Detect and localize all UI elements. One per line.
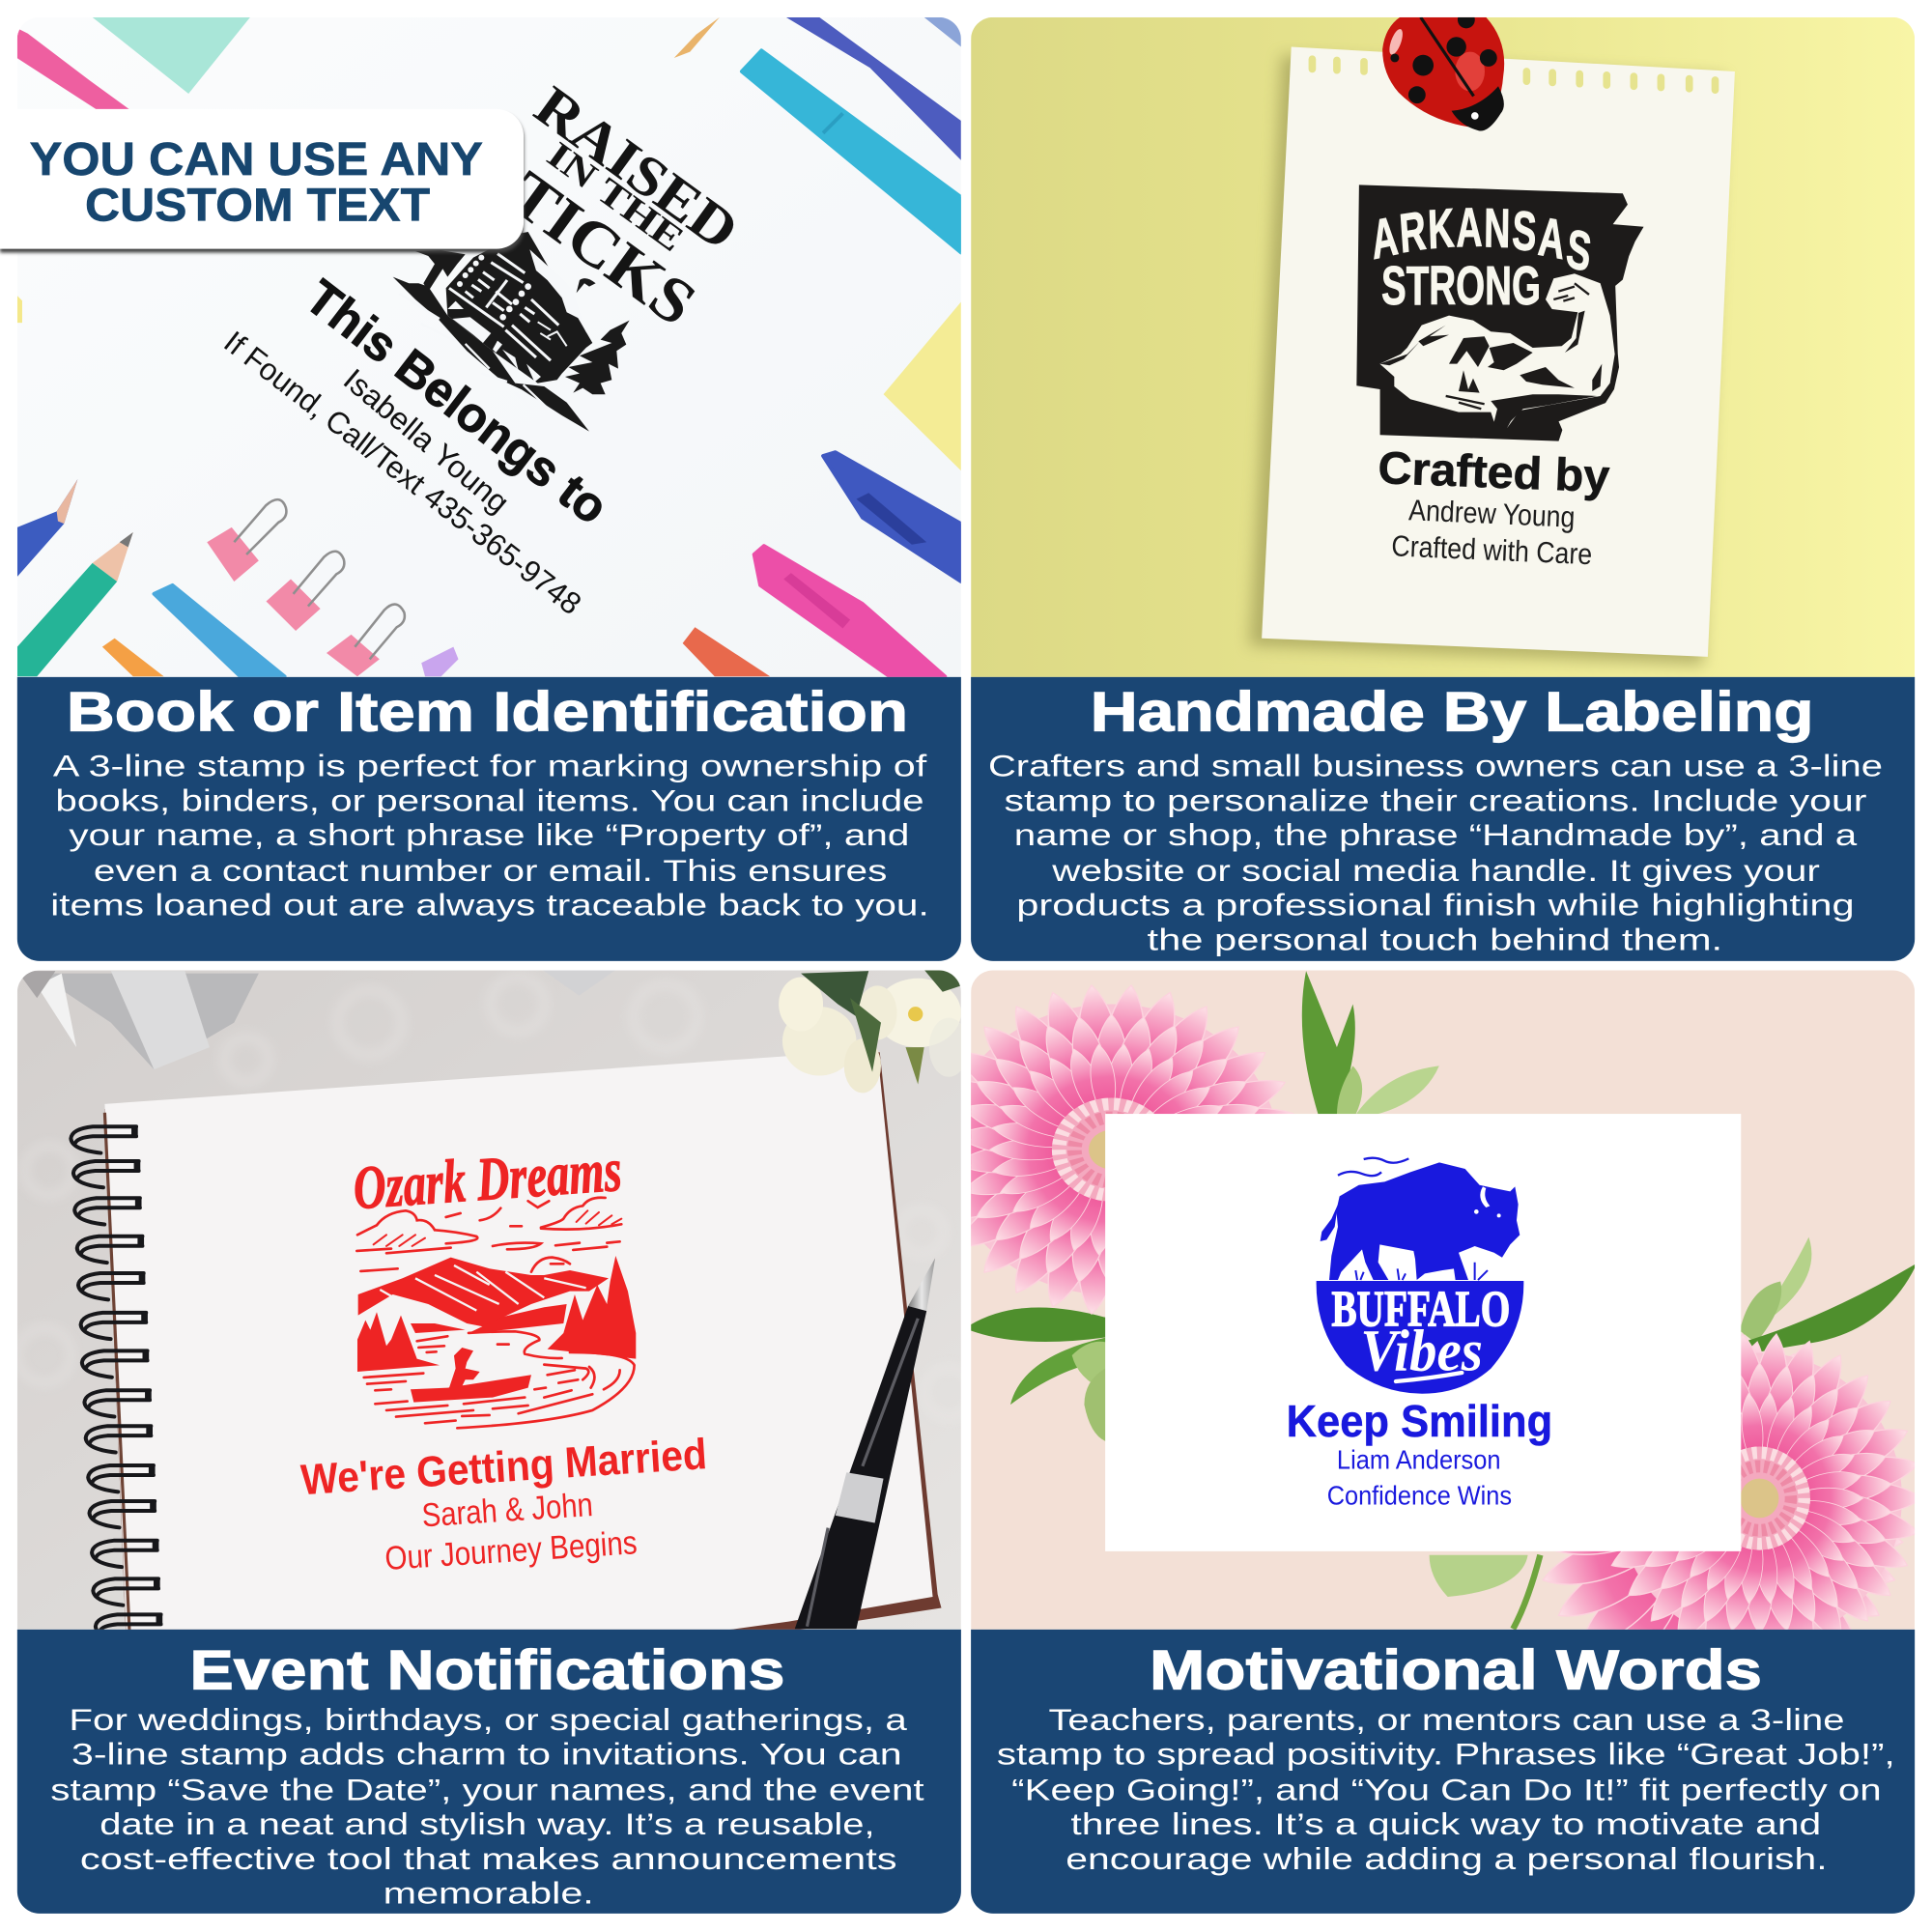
caption band: event notifications — [17, 1630, 961, 1914]
caption band: handmade by labeling: Crafters and small business owners can use a 3-line — [988, 749, 1883, 783]
callout: you can use any custom text — [0, 109, 524, 252]
binder clips — [207, 499, 405, 676]
white card — [1105, 1114, 1741, 1551]
icon: arkansas state silhouette — [1356, 185, 1644, 441]
caption band: motivational words — [971, 1630, 1915, 1914]
caption band: handmade by labeling — [971, 677, 1915, 961]
caption band: book or item identification: even a contact number or email. This ensures — [94, 853, 887, 888]
caption band: motivational words: three lines. It’s a quick way to motivate and — [1070, 1806, 1821, 1841]
icon: bison and bowl badge: Vibes — [1360, 1318, 1483, 1383]
stamp impression: arkansas strong: Crafted with Care — [1391, 529, 1593, 571]
caption band: handmade by labeling: name or shop, the phrase “Handmade by”, and a — [1014, 817, 1858, 852]
caption band: event notifications: date in a neat and stylish way. It’s a reusable, — [99, 1806, 875, 1841]
stamp impression: buffalo vibes — [1287, 1158, 1552, 1510]
stamp impression: arkansas strong: Crafted by — [1378, 442, 1610, 502]
caption band: handmade by labeling: the personal touch behind them. — [1147, 922, 1722, 956]
caption band: event notifications: memorable. — [384, 1876, 594, 1911]
stamp impression: raised in the sticks — [217, 74, 750, 621]
stamp impression: buffalo vibes: Keep Smiling — [1287, 1396, 1552, 1446]
callout: you can use any custom text: CUSTOM TEXT — [85, 179, 431, 231]
caption band: book or item identification: Book or Item Identification — [67, 681, 908, 743]
photo: note pinned on yellow wall — [971, 10, 1915, 678]
stamp impression: arkansas strong: Andrew Young — [1408, 494, 1576, 534]
stamp impression: raised in the sticks: This Belongs to — [296, 270, 618, 535]
caption band: book or item identification: your name, a short phrase like “Property of”, and — [69, 817, 909, 852]
panel: event notifications — [17, 970, 974, 1914]
stamp impression: raised in the sticks: RAISED — [524, 74, 750, 263]
caption band: book or item identification: items loaned out are always traceable back to you. — [50, 888, 929, 923]
caption band: handmade by labeling: products a professional finish while highlighting — [1016, 888, 1855, 923]
notebook — [71, 1050, 941, 1720]
paper note — [1262, 46, 1735, 657]
gift box and ribbon — [17, 970, 616, 1069]
icon: flexed arm with mountains: STRONG — [1381, 255, 1541, 317]
stamp impression: ozark dreams — [299, 1135, 708, 1577]
caption band: motivational words: stamp to spread positivity. Phrases like “Great Job!”, — [997, 1737, 1895, 1772]
stamp impression: arkansas strong — [1356, 185, 1644, 571]
panel: handmade by labeling — [971, 10, 1915, 961]
stamp impression: ozark dreams: Ozark Dreams — [351, 1135, 624, 1222]
illustration: lake and mountain scene — [356, 1198, 636, 1428]
icon: bison and bowl badge — [1317, 1158, 1523, 1394]
flower: bottom-right pink gerbera — [1484, 1279, 1932, 1745]
stamp impression: ozark dreams: Our Journey Begins — [384, 1524, 639, 1577]
caption band: motivational words: Motivational Words — [1150, 1640, 1762, 1702]
stationery: markers, notes and pencils — [17, 17, 961, 676]
caption band: event notifications: 3-line stamp adds charm to invitations. You can — [71, 1737, 902, 1772]
stamp impression: buffalo vibes: Liam Anderson — [1337, 1444, 1501, 1474]
caption band: event notifications: stamp “Save the Date”, your names, and the event — [50, 1773, 924, 1807]
stamp impression: ozark dreams: We're Getting Married — [299, 1431, 708, 1504]
stamp impression: ozark dreams: Sarah & John — [421, 1487, 594, 1534]
caption band: handmade by labeling: website or social media handle. It gives your — [1051, 853, 1820, 888]
caption band: handmade by labeling: stamp to personalize their creations. Include your — [1005, 782, 1867, 817]
caption band: motivational words: encourage while adding a personal flourish. — [1065, 1841, 1828, 1876]
icon: black fountain pen — [795, 1258, 935, 1629]
stamp impression: raised in the sticks: TICKS — [496, 158, 708, 340]
caption band: handmade by labeling: Handmade By Labeling — [1091, 681, 1814, 743]
flower: top-left pink gerbera — [848, 930, 1376, 1369]
leaves and buds — [971, 971, 1918, 1629]
photo: pink gerbera flowers with card — [848, 930, 1932, 1745]
stamp impression: buffalo vibes: Confidence Wins — [1327, 1480, 1512, 1510]
caption band: event notifications: For weddings, birthdays, or special gatherings, a — [69, 1702, 907, 1737]
icon: log cabin with pine trees — [393, 232, 630, 432]
stamp impression: raised in the sticks: If Found, Call/Text 435-365-9748 — [217, 324, 588, 621]
caption band: motivational words: Teachers, parents, or mentors can use a 3-line — [1048, 1702, 1844, 1737]
caption band: event notifications: cost-effective tool that makes announcements — [80, 1841, 897, 1876]
stamp impression: raised in the sticks: Isabella Young — [337, 361, 516, 520]
panel: book or item identification — [17, 17, 961, 961]
caption band: book or item identification: A 3-line stamp is perfect for marking ownership of — [53, 749, 926, 783]
icon: flexed arm with mountains — [1369, 197, 1615, 428]
icon: bison and bowl badge: BUFFALO — [1331, 1280, 1510, 1338]
stamp impression: raised in the sticks: IN THE — [539, 134, 691, 260]
bouquet of cream flowers — [779, 970, 969, 1093]
icon: ladybug magnet — [1382, 10, 1504, 130]
photo: spiral notebook on lace — [17, 970, 974, 1720]
icon: flexed arm with mountains: ARKANSAS — [1369, 197, 1594, 284]
caption band: event notifications: Event Notifications — [189, 1640, 784, 1702]
photo: stationery desk with stamp — [17, 17, 961, 678]
caption band: motivational words: “Keep Going!”, and “You Can Do It!” fit perfectly on — [1011, 1773, 1882, 1807]
panel: motivational words — [848, 930, 1932, 1914]
callout: you can use any custom text: YOU CAN USE ANY — [30, 133, 483, 185]
caption band: book or item identification — [17, 677, 961, 961]
caption band: book or item identification: books, binders, or personal items. You can include — [55, 782, 924, 817]
